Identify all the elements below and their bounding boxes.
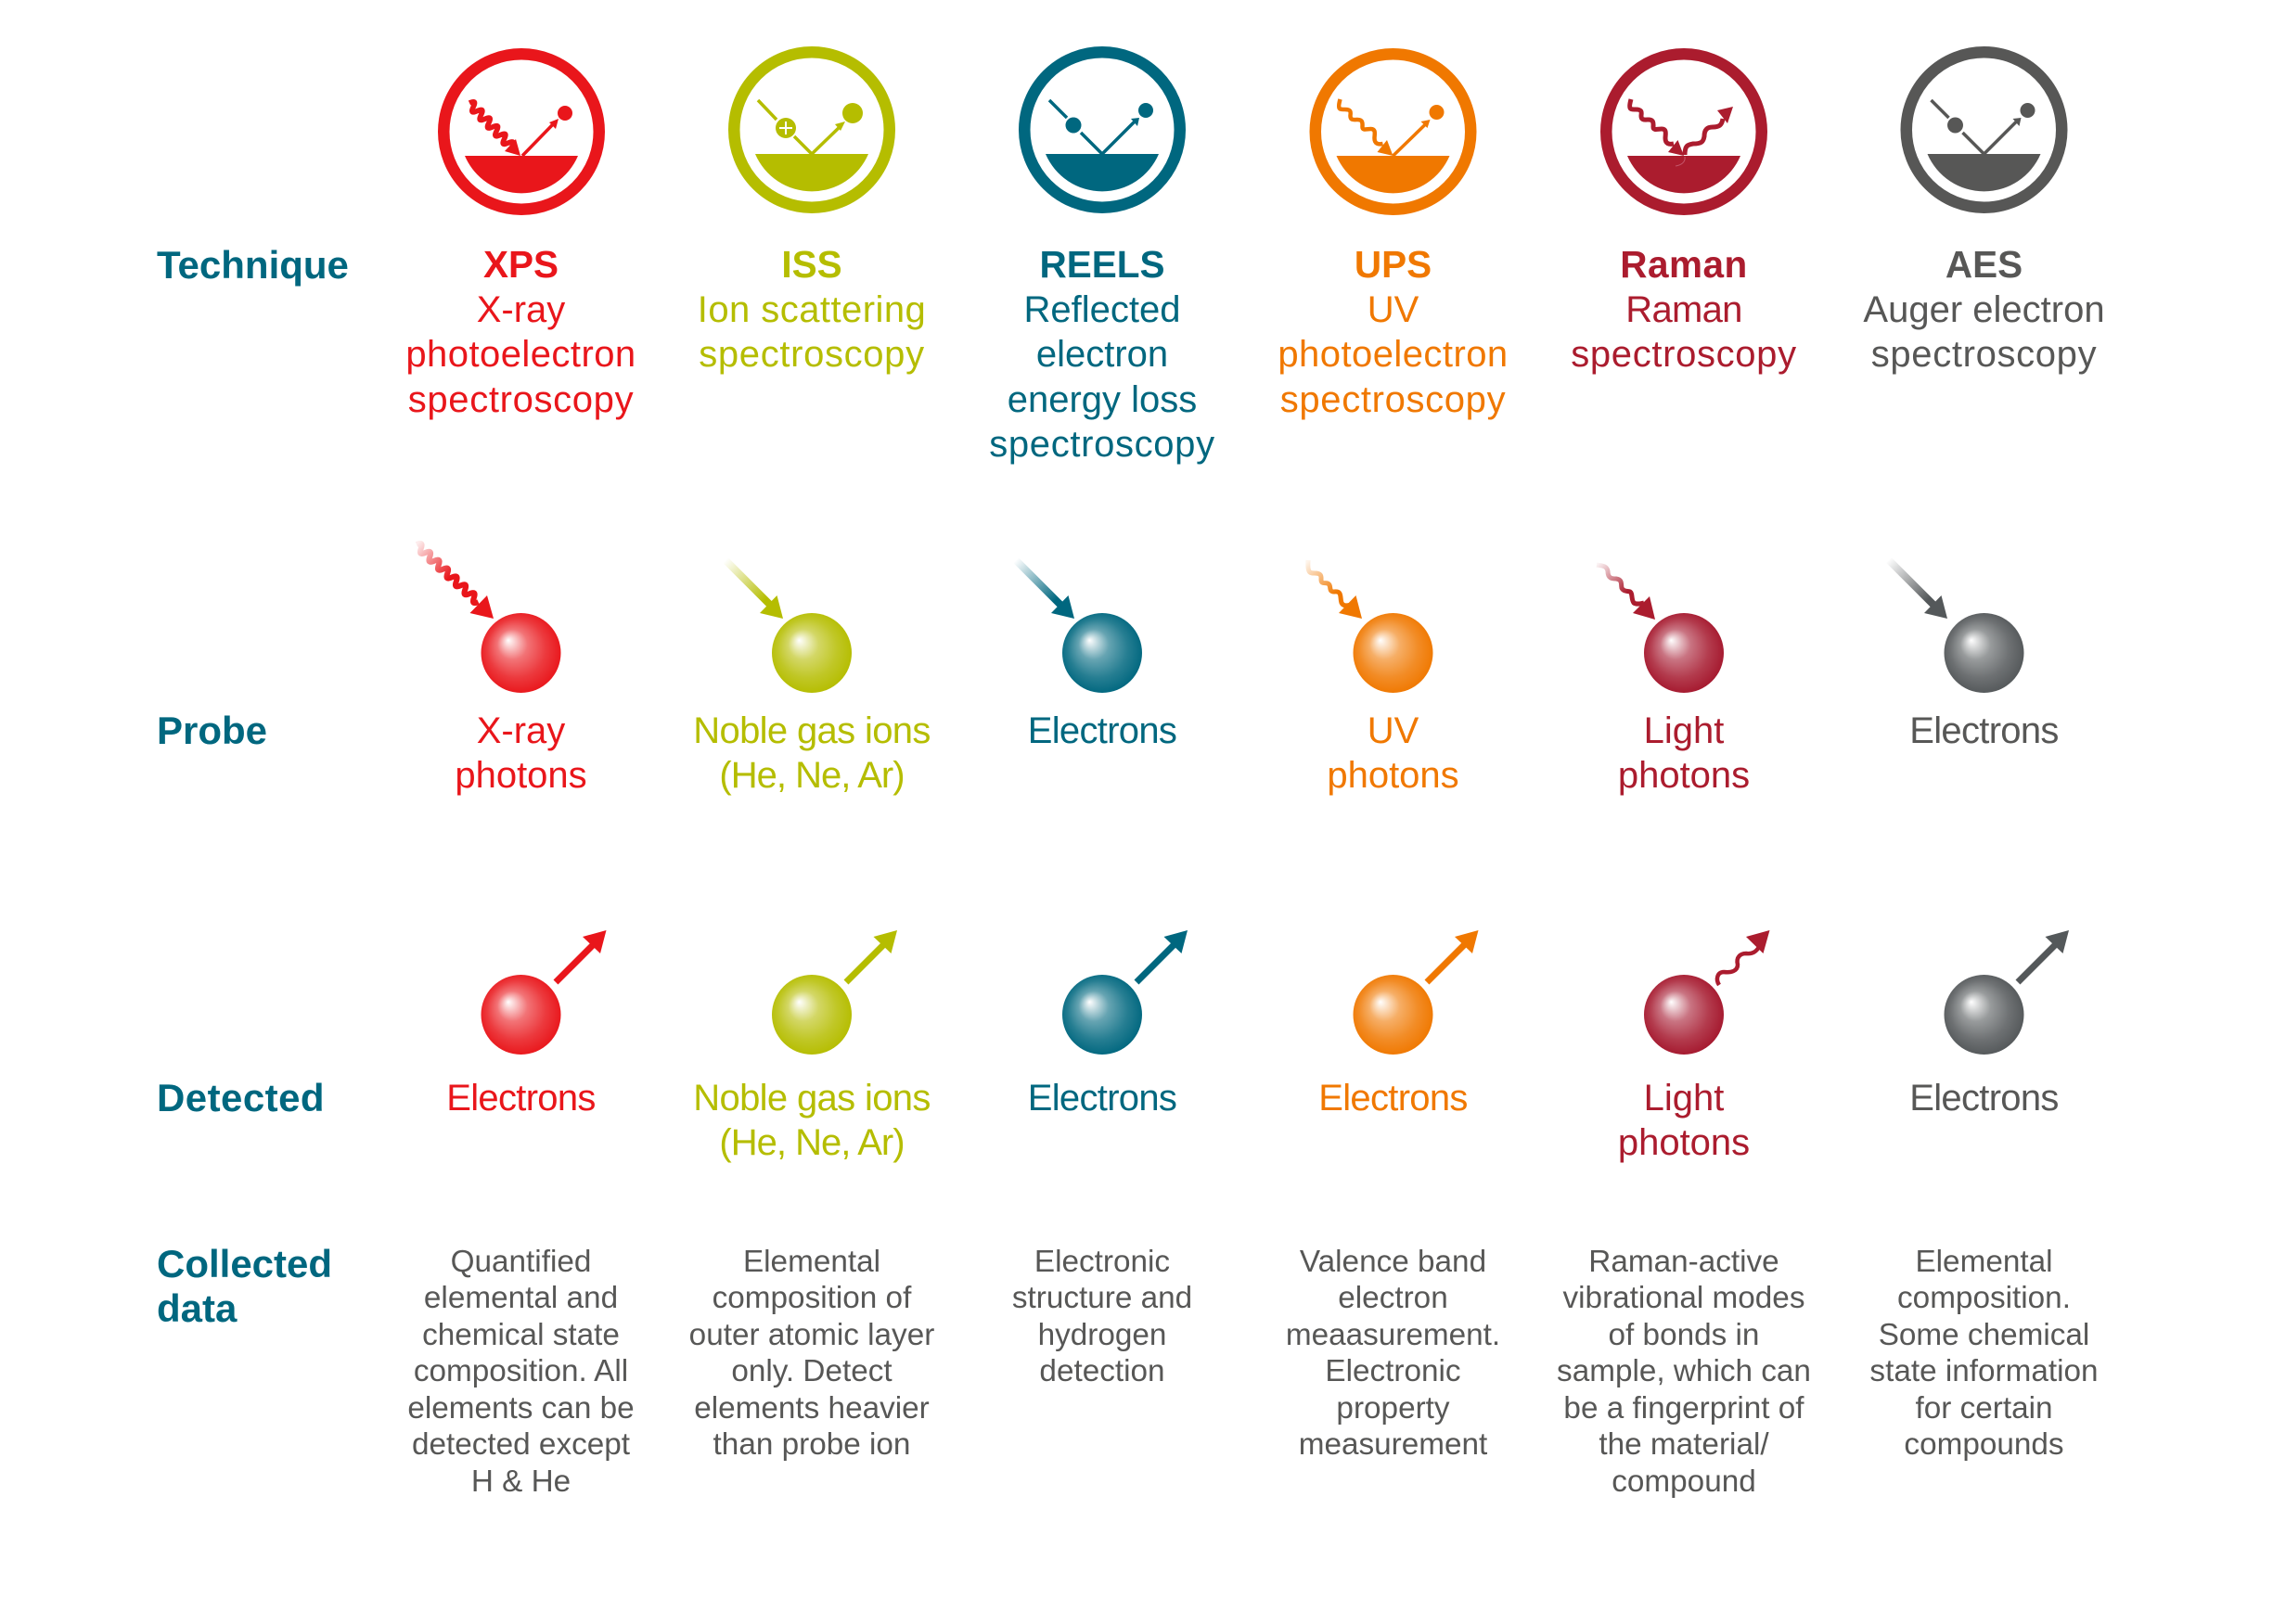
probe label: XPS: X-ray [477,710,565,751]
collected data: XPS: Quantified [451,1245,591,1278]
technique label: XPS [405,243,636,420]
collected data: REELS: structure and [1012,1281,1192,1315]
technique label: ISS: spectroscopy [699,334,925,375]
detected label: AES: Electrons [1909,1078,2059,1119]
probe label: XPS [455,710,587,796]
technique label: UPS: UV [1368,289,1419,330]
probe label: ISS: Noble gas ions [693,710,931,751]
technique label: AES: AES [1946,243,2023,286]
detected label: Raman: Light [1644,1078,1724,1119]
collected data: Raman: be a fingerprint of [1563,1391,1804,1426]
row heading: Collected data: data [157,1286,237,1330]
probe label: Raman: Light [1644,710,1724,751]
technique label: Raman: Raman [1620,243,1748,286]
collected data: XPS: elements can be [407,1391,635,1426]
collected data: UPS: Electronic [1325,1354,1461,1388]
probe label: XPS: photons [455,755,587,796]
collected data: AES: for certain [1915,1391,2053,1426]
row heading: Detected: Detected [157,1076,325,1119]
collected data: Raman: vibrational modes [1563,1281,1804,1315]
technique label: REELS [989,243,1215,465]
detected: XPS electron [481,930,607,1055]
detected label: Raman: photons [1618,1122,1750,1163]
technique label: UPS: photoelectron [1278,334,1509,375]
detected: Raman light photon [1644,930,1770,1055]
icon: ISS technique [734,52,890,208]
probe label: UPS: photons [1327,755,1459,796]
collected data: UPS: Valence band [1300,1245,1486,1278]
collected data: REELS: detection [1039,1354,1165,1388]
collected data: XPS [407,1245,635,1499]
row heading: Collected data: Collected [157,1242,332,1285]
icon: UPS technique [1316,54,1470,210]
detected label: ISS: Noble gas ions [693,1078,931,1119]
collected data: AES: composition. [1897,1281,2071,1315]
collected data: XPS: detected except [412,1427,630,1462]
collected data: ISS: composition of [713,1281,911,1315]
detected: UPS electron [1353,930,1479,1055]
probe label: UPS [1327,710,1459,796]
technique label: AES: spectroscopy [1871,334,2097,375]
collected data: REELS [1012,1245,1192,1388]
technique label: UPS: UPS [1355,243,1432,286]
icon: REELS technique [1024,52,1180,208]
row heading: Probe: Probe [157,709,267,752]
collected data: ISS: Elemental [743,1245,880,1278]
detected label: Raman [1618,1078,1750,1163]
detected label: REELS: Electrons [1028,1078,1176,1119]
probe: AES electron [1889,560,2024,693]
technique label: XPS: photoelectron [405,334,636,375]
collected data: Raman [1557,1245,1811,1499]
collected data: REELS: hydrogen [1038,1318,1166,1352]
collected data: AES: state information [1869,1354,2099,1388]
technique label: REELS: Reflected [1024,289,1180,330]
detected: ISS noble gas ion [772,930,897,1055]
probe: Raman light photon [1597,565,1724,693]
icon: AES technique [1907,52,2061,208]
probe: XPS X-ray photon [414,542,560,693]
collected data: Raman: of bonds in [1609,1318,1759,1352]
technique label: UPS [1278,243,1509,420]
technique label: UPS: spectroscopy [1280,379,1506,420]
detected label: ISS [693,1078,931,1163]
collected data: XPS: chemical state [422,1318,620,1352]
collected data: Raman: compound [1612,1464,1756,1499]
technique label: XPS: spectroscopy [408,379,634,420]
detected label: ISS: (He, Ne, Ar) [719,1122,905,1163]
collected data: Raman: Raman-active [1588,1245,1779,1278]
icon: Raman technique [1606,54,1762,210]
technique label: REELS: energy loss [1008,379,1197,420]
collected data: UPS: property [1336,1391,1450,1426]
technique label: REELS: spectroscopy [989,424,1215,465]
collected data: UPS [1286,1245,1500,1462]
collected data: ISS: than probe ion [713,1427,910,1462]
detected label: UPS: Electrons [1318,1078,1468,1119]
collected data: XPS: elemental and [424,1281,618,1315]
technique label: Raman: Raman [1625,289,1742,330]
technique label: XPS: X-ray [477,289,565,330]
collected data: AES: Elemental [1915,1245,2053,1278]
icon: XPS technique [443,54,599,210]
probe label: ISS [693,710,931,796]
technique label: ISS: Ion scattering [698,289,926,330]
collected data: Raman: sample, which can [1557,1354,1811,1388]
probe label: REELS: Electrons [1028,710,1176,751]
collected data: Raman: the material/ [1599,1427,1769,1462]
probe: UPS photon [1308,560,1432,693]
detected label: XPS: Electrons [446,1078,596,1119]
technique label: REELS: REELS [1039,243,1165,286]
row heading: Technique: Technique [157,243,349,286]
collected data: ISS: elements heavier [694,1391,930,1426]
probe label: Raman: photons [1618,755,1750,796]
detected: REELS electron [1062,930,1188,1055]
technique label: REELS: electron [1036,334,1168,375]
probe label: AES: Electrons [1909,710,2059,751]
collected data: ISS [689,1245,934,1462]
collected data: XPS: composition. All [414,1354,628,1388]
collected data: UPS: meaasurement. [1286,1318,1500,1352]
technique label: ISS: ISS [781,243,842,286]
collected data: AES [1869,1245,2099,1462]
probe label: Raman [1618,710,1750,796]
technique label: AES [1863,243,2105,375]
technique label: AES: Auger electron [1863,289,2105,330]
collected data: XPS: H & He [471,1464,571,1499]
collected data: ISS: outer atomic layer [689,1318,934,1352]
collected data: AES: compounds [1904,1427,2064,1462]
technique label: XPS: XPS [483,243,559,286]
collected data: ISS: only. Detect [731,1354,893,1388]
technique label: Raman [1571,243,1797,375]
technique label: Raman: spectroscopy [1571,334,1797,375]
technique label: ISS [698,243,926,375]
probe label: UPS: UV [1368,710,1419,751]
row heading: Collected data [157,1242,332,1330]
probe label: ISS: (He, Ne, Ar) [719,755,905,796]
probe: ISS noble gas ion [726,560,852,693]
probe: REELS electron [1016,560,1142,693]
collected data: UPS: electron [1338,1281,1448,1315]
collected data: AES: Some chemical [1879,1318,2089,1352]
collected data: UPS: measurement [1299,1427,1487,1462]
collected data: REELS: Electronic [1034,1245,1170,1278]
detected: AES electron [1945,930,2069,1055]
